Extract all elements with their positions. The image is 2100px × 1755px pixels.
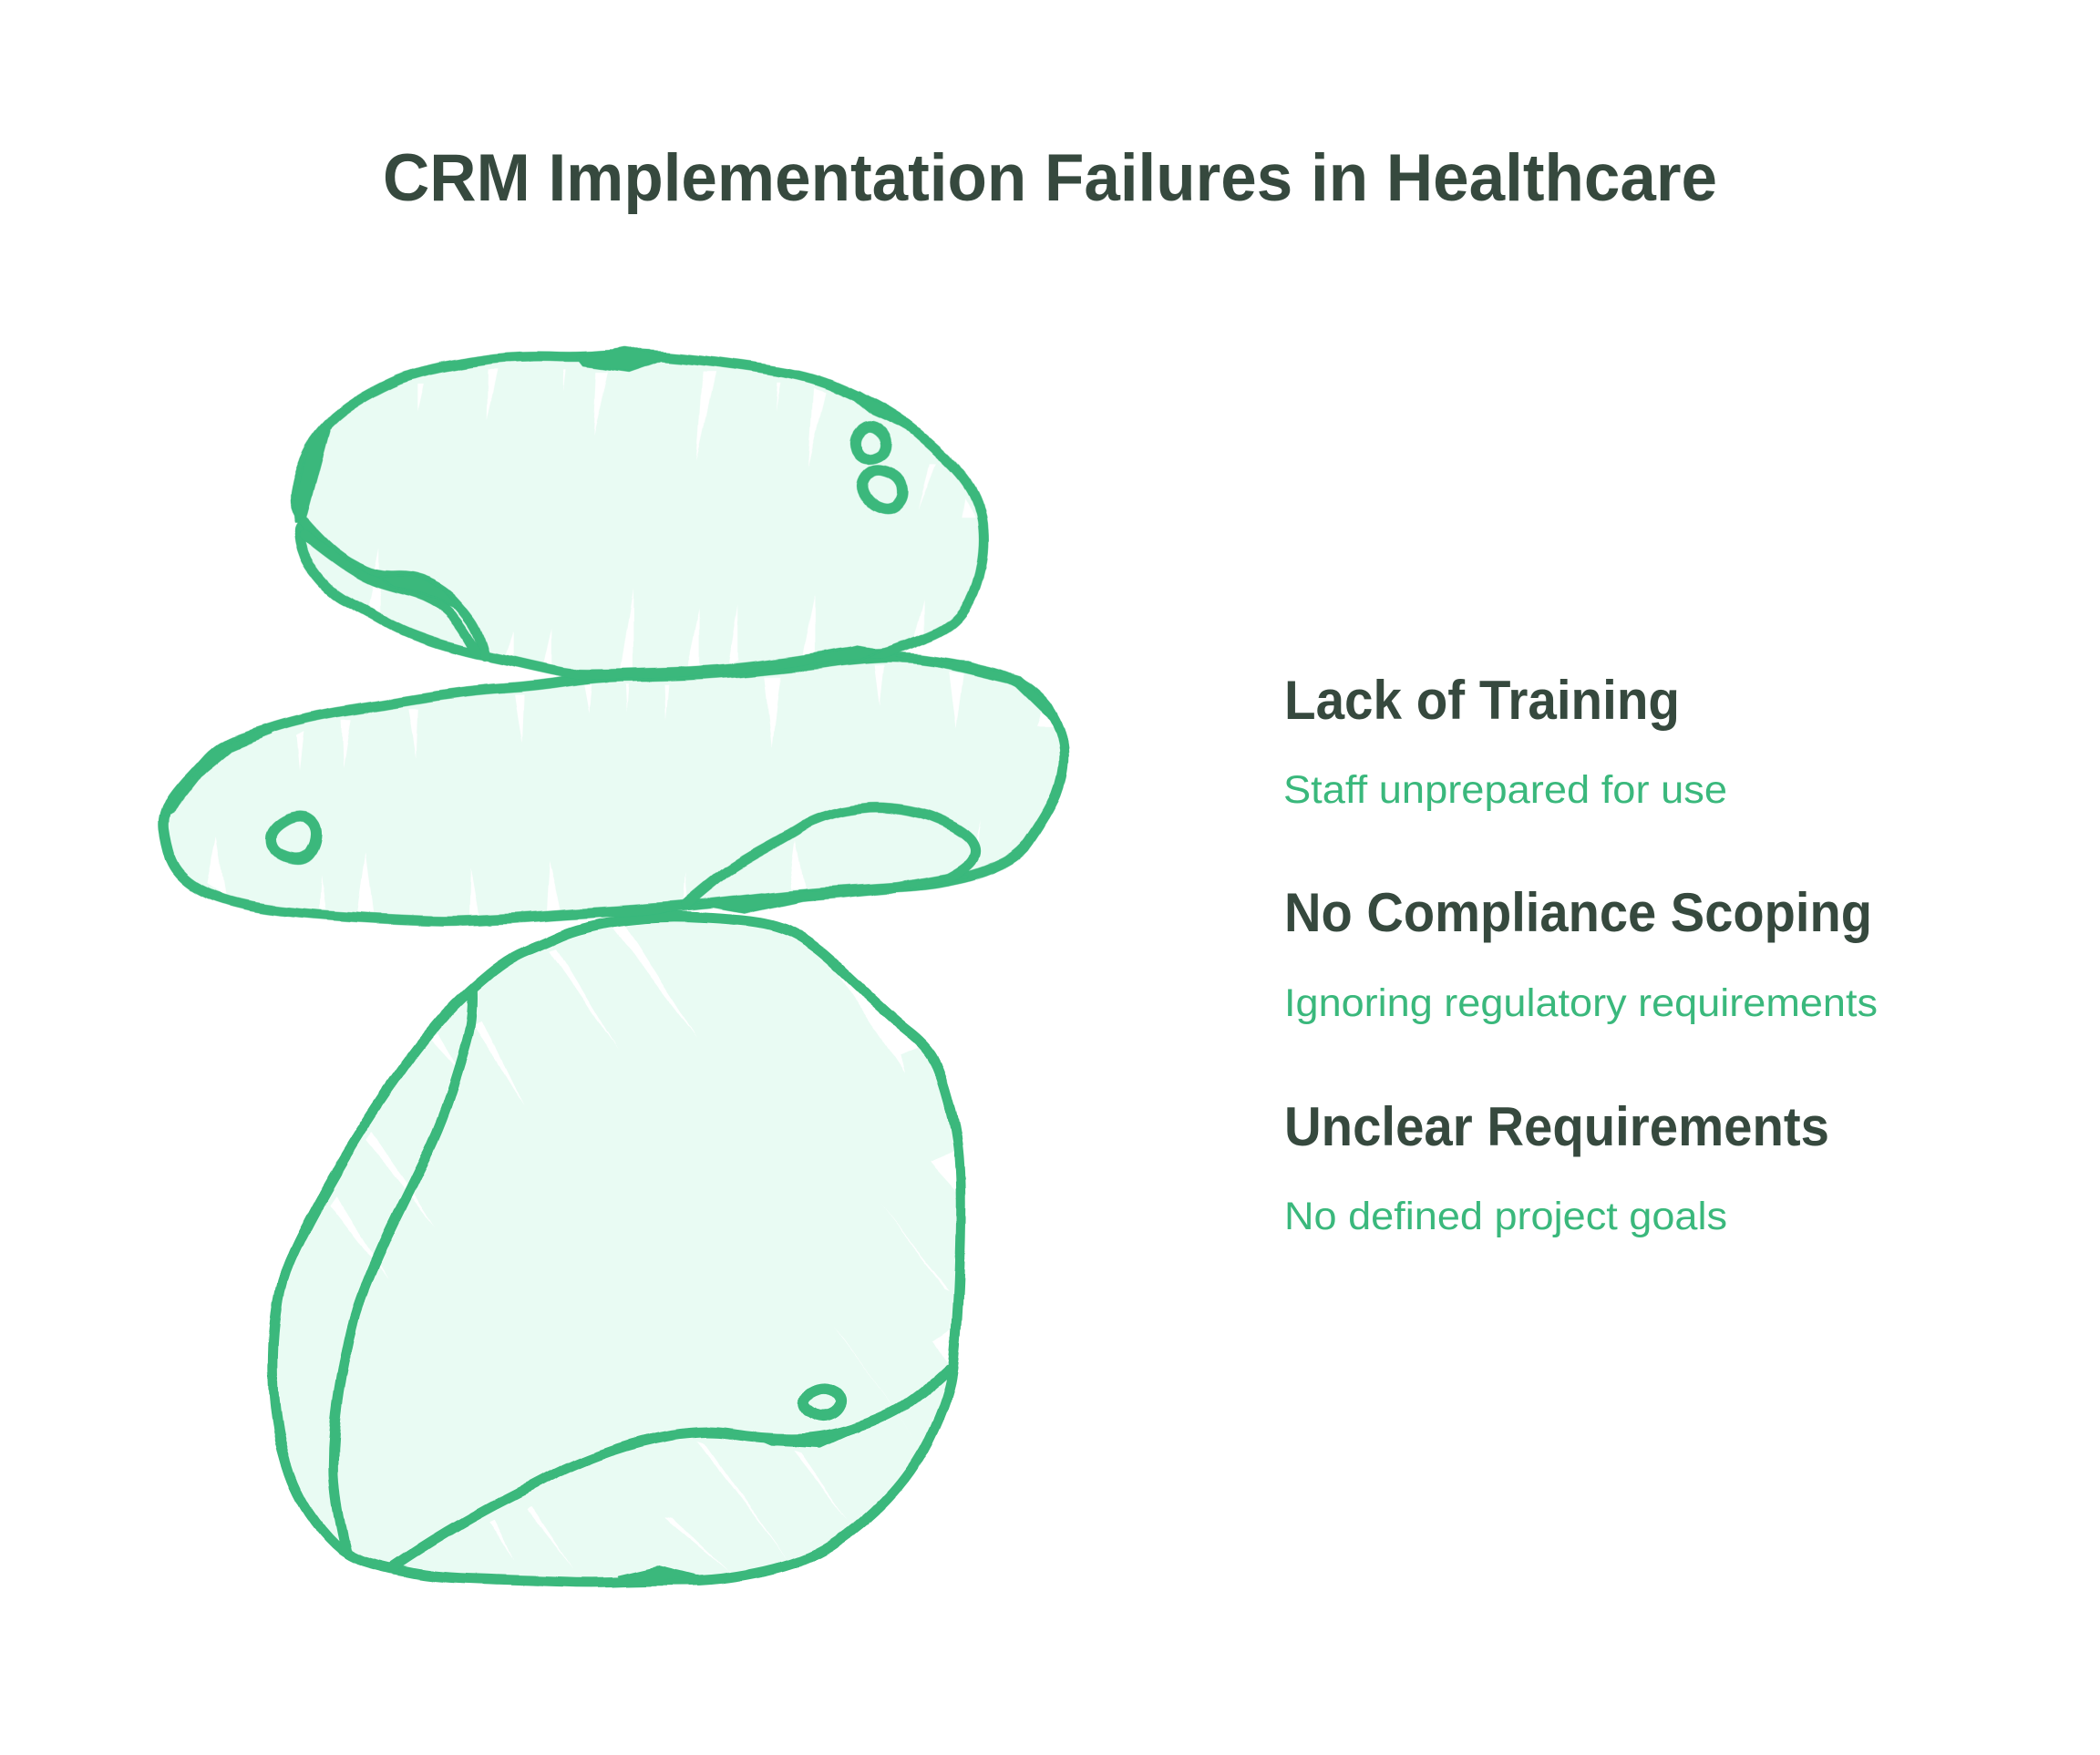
heading: Unclear Requirements xyxy=(1284,1096,1829,1157)
spot: upper xyxy=(856,426,887,459)
outline xyxy=(163,657,1064,921)
illustration: stacked stones xyxy=(162,348,1065,1583)
description: No defined project goals xyxy=(1284,1195,1727,1238)
heading: No Compliance Scoping xyxy=(1284,882,1872,943)
title: CRM Implementation Failures in Healthcare xyxy=(383,141,1717,215)
crease: left xyxy=(333,990,472,1550)
item: unclear requirements xyxy=(1284,1096,1829,1238)
stone: top xyxy=(293,348,983,675)
description: Staff unprepared for use xyxy=(1283,768,1727,812)
heading: Lack of Training xyxy=(1284,670,1680,731)
item: no compliance scoping xyxy=(1284,882,1878,1025)
spot: lower xyxy=(862,470,903,509)
stone: middle xyxy=(162,657,1065,921)
item: lack of training xyxy=(1283,670,1727,812)
crease: right xyxy=(687,807,975,905)
outline xyxy=(273,917,961,1582)
crease: bottom xyxy=(394,1369,949,1566)
description: Ignoring regulatory requirements xyxy=(1284,981,1878,1025)
spot xyxy=(804,1390,840,1416)
crease: left xyxy=(304,522,485,657)
outline xyxy=(294,354,983,675)
stone: bottom xyxy=(273,917,961,1583)
spot xyxy=(272,816,316,859)
